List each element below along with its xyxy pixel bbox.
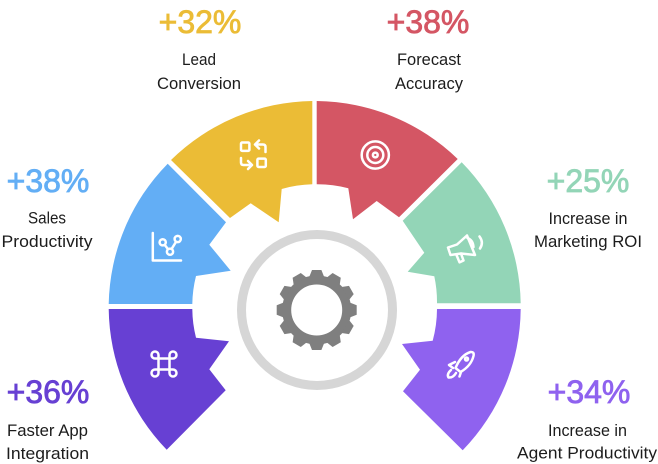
icon: line chart — [153, 233, 181, 260]
callout: sales productivity — [2, 163, 93, 251]
callout: agent productivity: Increase in — [548, 422, 627, 440]
callout: lead conversion: +32% — [159, 4, 241, 40]
callout: faster app integration: Faster App — [7, 422, 88, 440]
callout: forecast accuracy — [387, 4, 469, 93]
callout: forecast accuracy: +38% — [387, 4, 469, 40]
callout: marketing roi: Increase in — [548, 210, 628, 228]
callout: sales productivity: +38% — [7, 163, 89, 199]
callout: sales productivity: Sales — [28, 210, 66, 228]
segment: lead conversion — [171, 101, 312, 222]
callout: marketing roi: +25% — [547, 163, 629, 199]
callout: faster app integration: Integration — [6, 445, 89, 463]
callout: marketing roi — [534, 163, 642, 251]
segment: sales productivity — [109, 164, 231, 304]
icon: rocket — [448, 352, 474, 378]
callout: forecast accuracy: Forecast — [397, 51, 461, 69]
icon: command key — [152, 352, 176, 377]
callout: lead conversion: Conversion — [157, 75, 241, 93]
segment: faster app integration — [109, 309, 229, 450]
callout: faster app integration — [6, 374, 89, 463]
segment: forecast accuracy — [317, 101, 458, 219]
callout: agent productivity: +34% — [548, 374, 630, 410]
icon: megaphone — [448, 236, 482, 262]
segment: marketing roi — [403, 162, 521, 303]
center ring — [242, 234, 392, 386]
callout: marketing roi: Marketing ROI — [534, 233, 642, 251]
icon: target — [362, 141, 389, 169]
segment: agent productivity — [402, 309, 521, 450]
icon: swap squares — [241, 140, 266, 169]
icon: center gear — [277, 270, 357, 350]
callout: agent productivity: Agent Productivity — [517, 444, 658, 462]
callout: lead conversion: Lead — [182, 51, 216, 69]
callout: lead conversion — [157, 4, 241, 93]
callout: agent productivity — [517, 374, 658, 462]
callout: faster app integration: +36% — [7, 374, 89, 410]
callout: forecast accuracy: Accuracy — [395, 75, 464, 93]
callout: sales productivity: Productivity — [2, 233, 93, 251]
